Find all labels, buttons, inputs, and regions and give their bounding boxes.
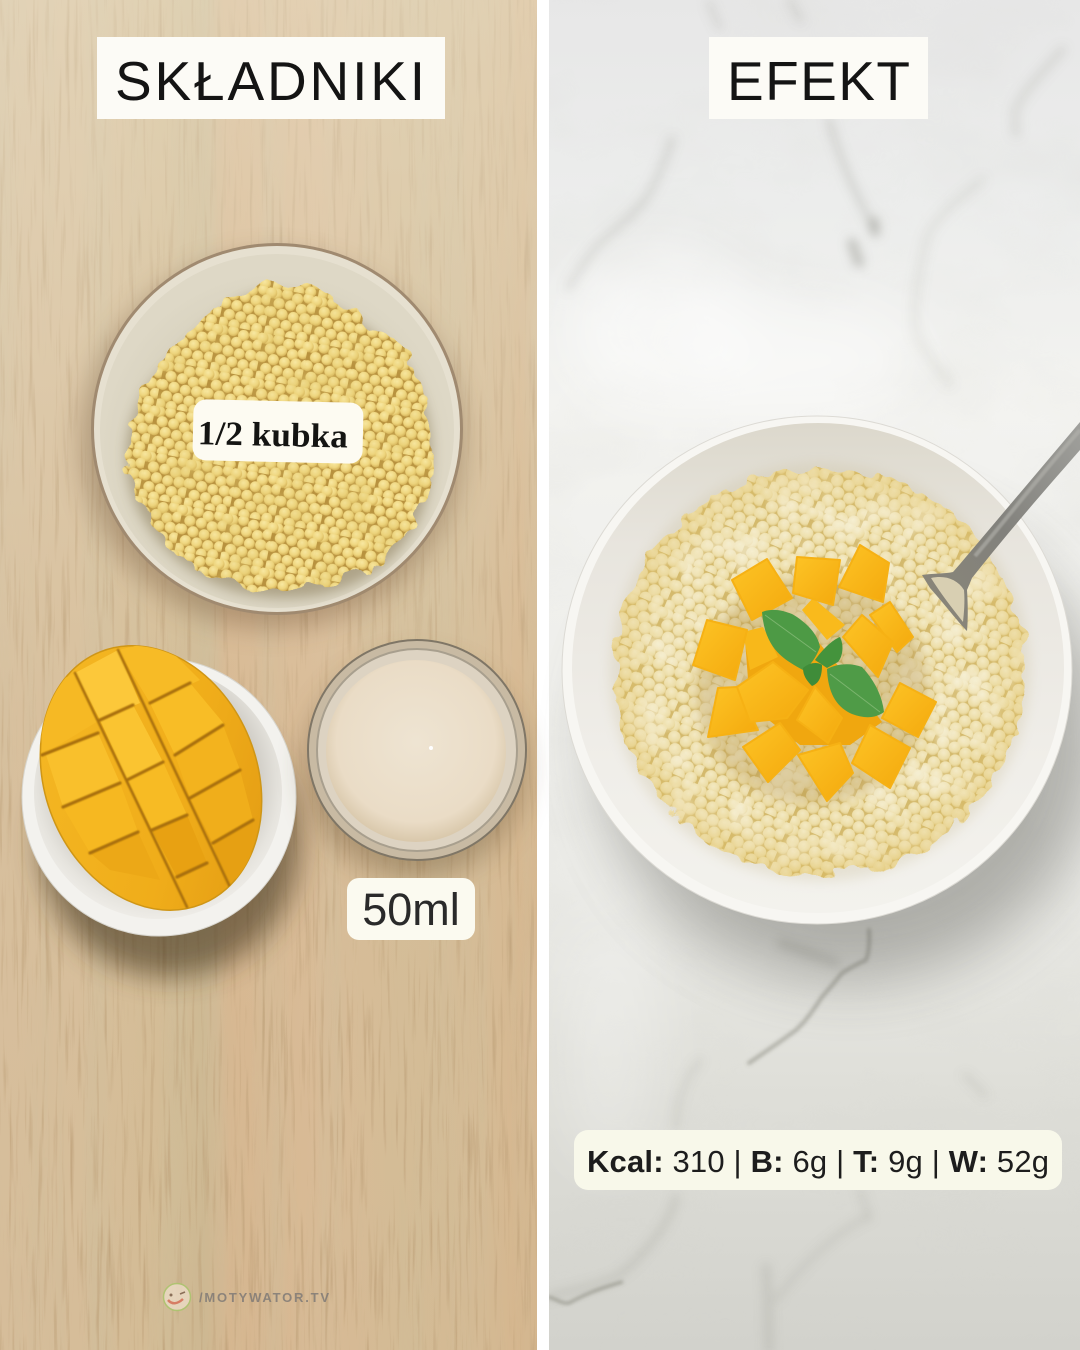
heading: EFEKT: EFEKT [727, 50, 910, 112]
bowl of dry millet [82, 243, 470, 628]
watermark: /MOTYWATOR.TV [199, 1290, 329, 1305]
mango cheek with cubes [40, 645, 262, 911]
label: 1/2 kubka [192, 399, 364, 464]
icon: smiling face logo [164, 1284, 190, 1310]
mango cubes [693, 545, 936, 804]
mint leaves [762, 610, 884, 717]
nutrition pill: Kcal: 310 | B: 6g | T: 9g | W: 52g [587, 1144, 1049, 1179]
white bowl with mango [2, 612, 300, 977]
heading: SKŁADNIKI [97, 37, 445, 119]
glass of milk [305, 640, 526, 878]
panel: ingredients on wood [0, 0, 537, 1350]
panel: finished dish on marble [549, 0, 1080, 1350]
bowl of porridge with mango [562, 416, 1080, 980]
marble background [549, 0, 1080, 1350]
spoon [922, 422, 1080, 631]
heading: EFEKT [709, 37, 928, 119]
millet grains [120, 279, 438, 604]
heading: SKŁADNIKI: SKŁADNIKI [115, 50, 425, 112]
watermark [164, 1284, 329, 1310]
label: 1/2 kubka: 1/2 kubka [197, 415, 348, 456]
label: 50ml: 50ml [362, 884, 460, 935]
label: 50ml [347, 878, 475, 940]
nutrition pill [574, 1130, 1062, 1190]
wood background [0, 0, 537, 1350]
porridge [608, 462, 1032, 884]
